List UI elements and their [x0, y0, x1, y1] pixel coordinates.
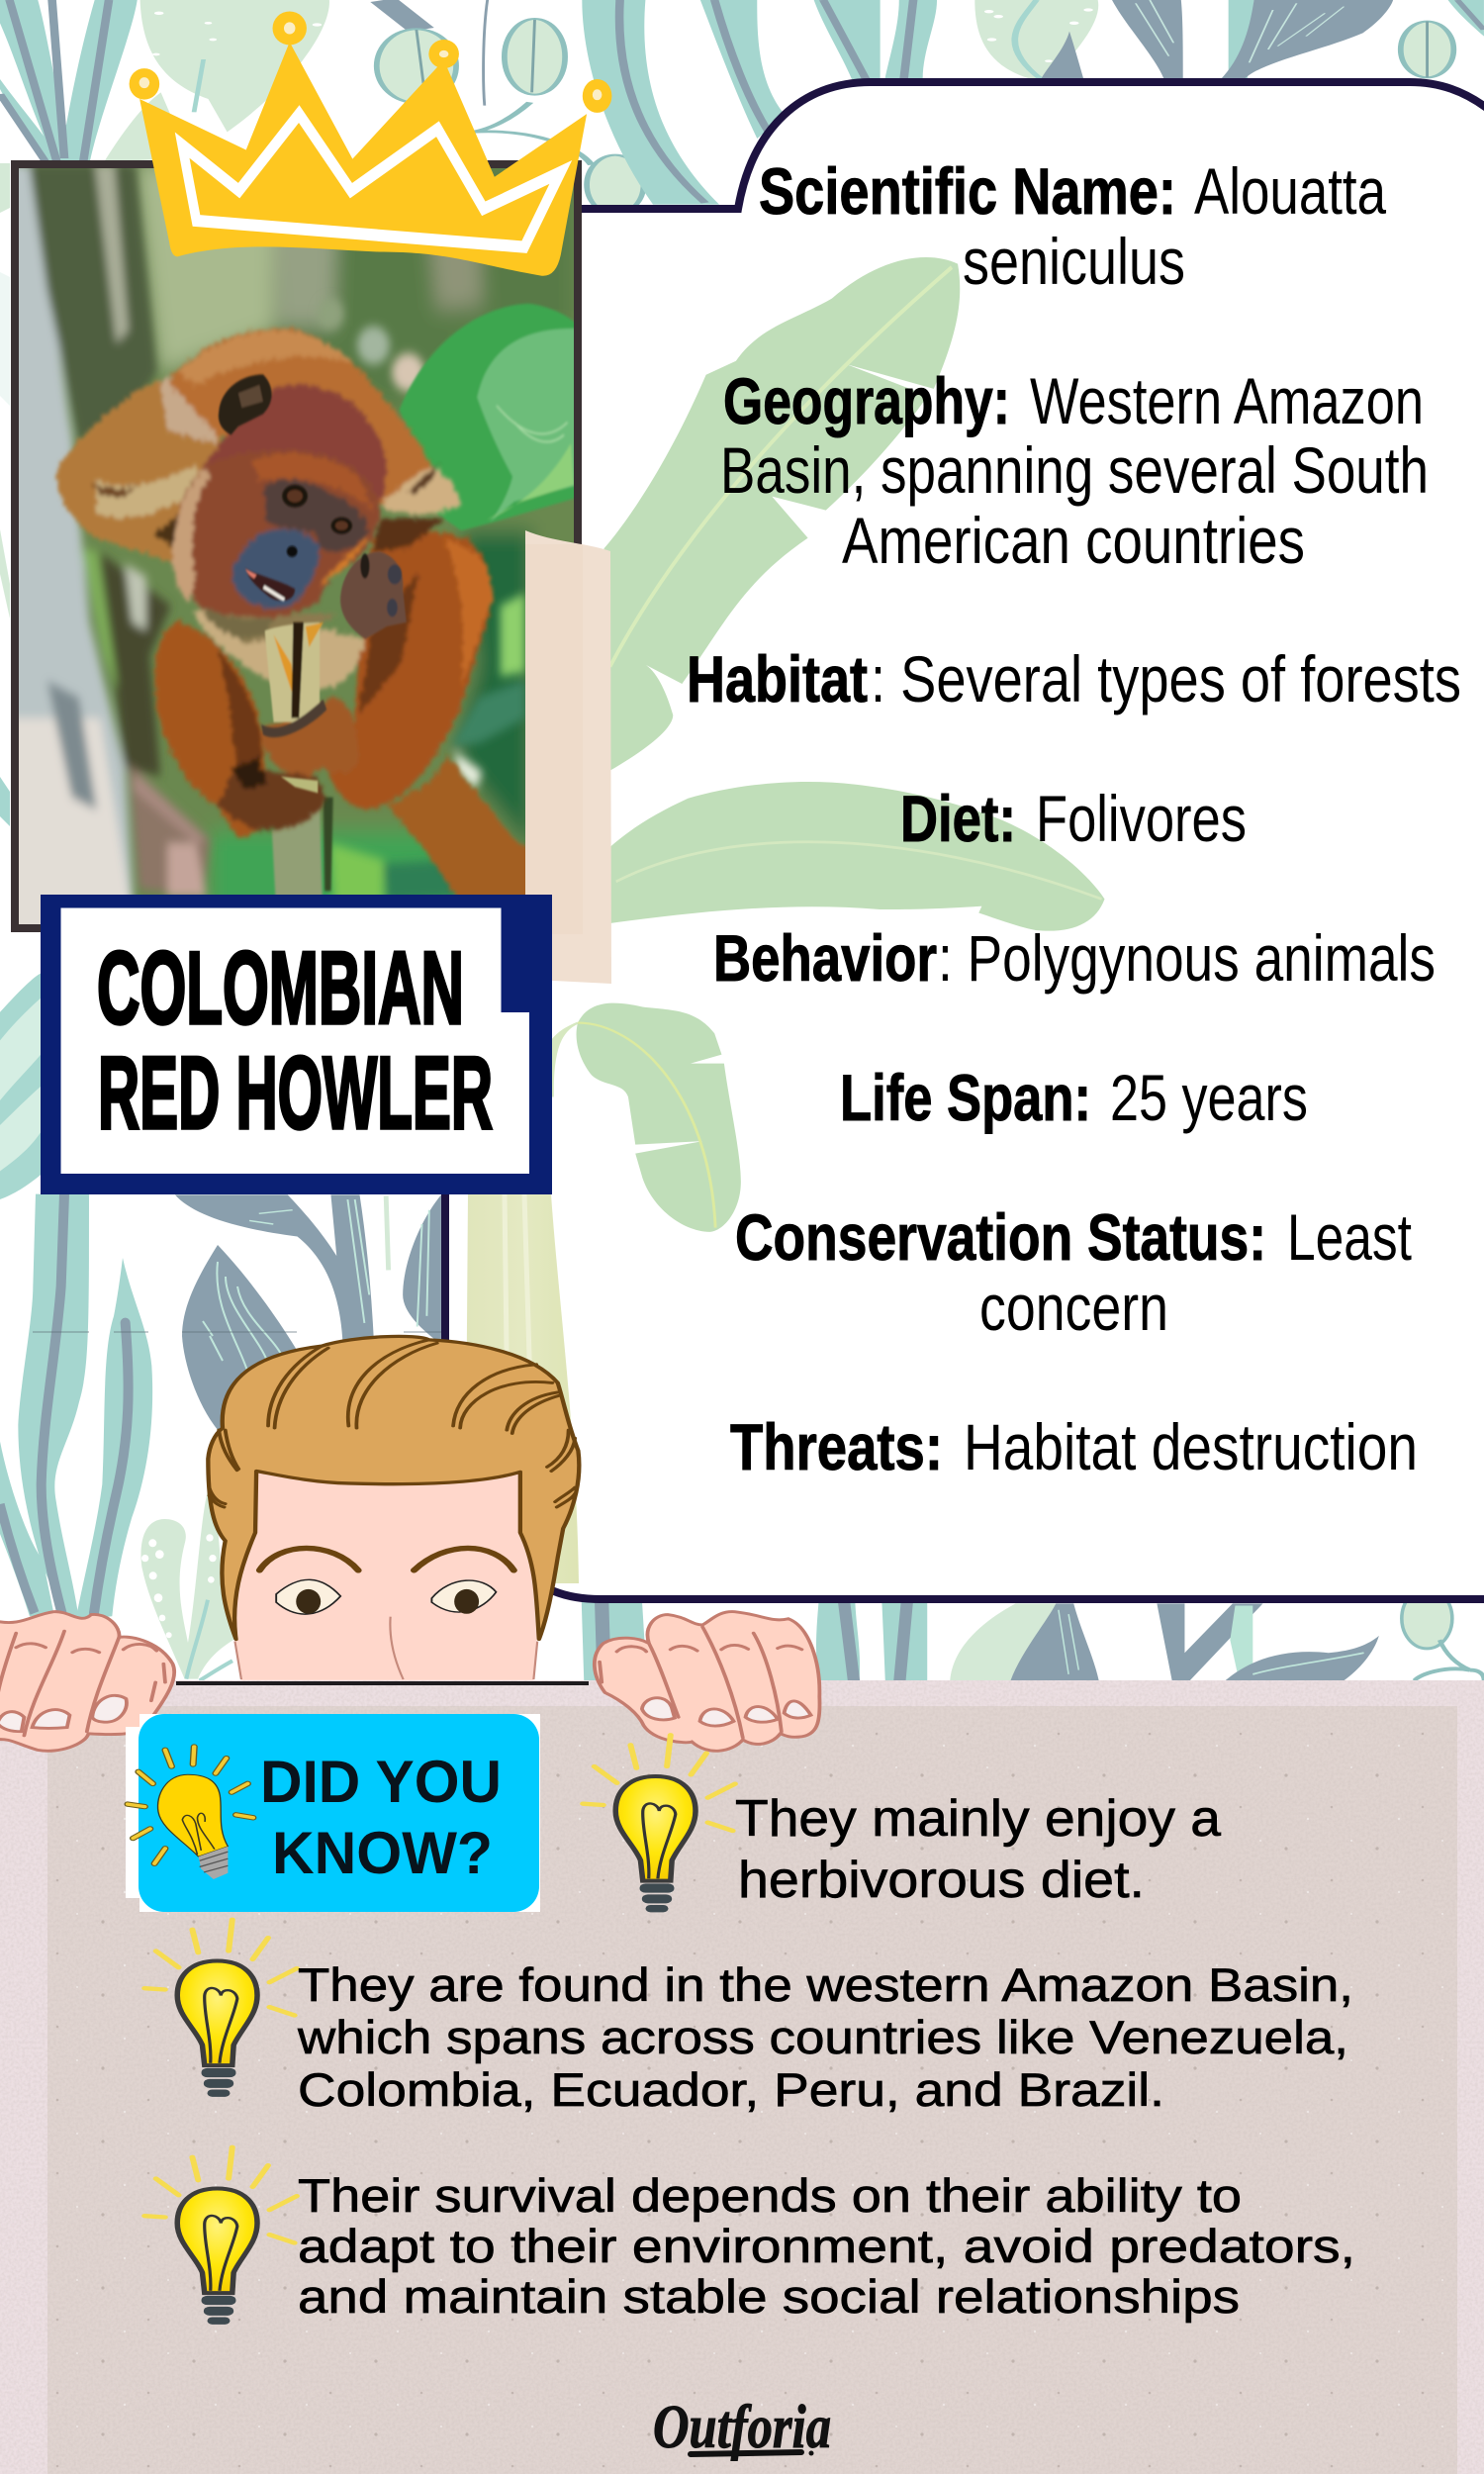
background: left edge foliage	[0, 163, 41, 1199]
logo: Outforia: Outforia	[653, 2394, 831, 2461]
hair	[208, 1336, 579, 1639]
hand at face	[340, 551, 407, 639]
text block: species facts	[687, 154, 1461, 1483]
fact 3: and maintain stable social relationships	[298, 2270, 1240, 2323]
nose and jaw lines	[234, 1617, 537, 1679]
fact: threats	[730, 1410, 1418, 1483]
fact: geography: American countries	[842, 504, 1305, 577]
title text: COLOMBIAN	[97, 931, 464, 1046]
background: pattern strip under panel	[582, 1588, 1484, 1683]
tail	[387, 756, 535, 930]
icon: badge light bulb	[128, 1747, 253, 1879]
fact: life span: Life Span:	[840, 1061, 1091, 1134]
left arm	[55, 368, 228, 564]
panel: species facts card	[445, 82, 1484, 1599]
left leg	[154, 620, 269, 839]
fact 3: adapt to their environment, avoid predators,	[298, 2220, 1355, 2272]
icon: left hand	[0, 1612, 174, 1751]
fact: life span	[840, 1061, 1308, 1134]
nose and mouth	[287, 546, 298, 557]
fact: conservation status	[735, 1200, 1412, 1344]
fact 1: herbivorous diet.	[738, 1852, 1145, 1909]
banana leaf decoration	[552, 257, 1105, 1232]
fact 2: They are found in the western Amazon Basin,	[298, 1958, 1353, 2011]
fact: scientific name: Alouatta	[1194, 154, 1386, 228]
banana stem decoration	[465, 1194, 579, 1583]
background: pink paper panel	[0, 1680, 1484, 2474]
fact 3: Their survival depends on their ability to	[298, 2169, 1242, 2222]
lower arm	[259, 698, 358, 777]
background: plants below title	[0, 1194, 441, 1680]
fact: habitat: Habitat	[687, 642, 868, 715]
icon: golden crown	[130, 12, 611, 276]
hair strands	[209, 1340, 575, 1507]
fact: life span: 25 years	[1110, 1061, 1308, 1134]
fact: scientific name: seniculus	[963, 225, 1185, 298]
decorative paper tape	[525, 530, 611, 984]
title text: RED HOWLER	[98, 1036, 493, 1151]
fact 1: They mainly enjoy a	[735, 1790, 1221, 1848]
photo: red howler monkey	[0, 143, 600, 956]
face and fringe	[174, 450, 380, 618]
background: botanical pattern top	[0, 0, 1484, 215]
fact 1	[583, 1735, 1221, 1912]
badge text	[260, 1749, 502, 1886]
fact 2: which spans across countries like Venezuela,	[297, 2011, 1348, 2063]
icon: light bulb	[144, 1920, 297, 2097]
badge text: KNOW?	[272, 1820, 493, 1886]
eyes	[276, 1579, 496, 1614]
badge: did you know	[126, 1714, 540, 1912]
right limb	[330, 532, 491, 809]
fact: threats: Threats:	[730, 1410, 943, 1483]
fact: diet: Folivores	[1036, 782, 1247, 855]
fact: geography: Geography:	[723, 364, 1010, 437]
fact: scientific name	[759, 154, 1386, 298]
fact: diet	[900, 782, 1247, 855]
eyebrows	[259, 1548, 513, 1570]
face	[233, 1472, 538, 1680]
chest	[192, 610, 366, 689]
fact: conservation status: concern	[979, 1271, 1168, 1344]
right shoulder tuft	[384, 468, 460, 515]
fact: conservation status: Conservation Status:	[735, 1200, 1266, 1274]
fact 2	[144, 1920, 1353, 2116]
fact 2: Colombia, Ecuador, Peru, and Brazil.	[298, 2063, 1164, 2116]
eyes	[282, 485, 308, 508]
icon: light bulb	[583, 1735, 735, 1912]
icon: right hand	[595, 1612, 820, 1751]
badge text: DID YOU	[260, 1749, 502, 1815]
fact: geography	[720, 364, 1429, 577]
twig held	[265, 622, 320, 722]
fact: conservation status: Least	[1287, 1200, 1412, 1274]
icon: light bulb	[144, 2147, 297, 2325]
fact: behavior	[713, 921, 1436, 995]
ear	[219, 374, 272, 434]
fact: diet: Diet:	[900, 782, 1016, 855]
fact: scientific name: Scientific Name:	[759, 154, 1176, 228]
back and crown of head	[167, 329, 433, 506]
desk edge line	[176, 1681, 589, 1685]
title plate	[41, 895, 552, 1194]
fact 3	[144, 2147, 1355, 2325]
fact: behavior: Behavior	[713, 921, 937, 995]
title text	[97, 931, 493, 1151]
character: peeking man	[208, 1336, 579, 1680]
